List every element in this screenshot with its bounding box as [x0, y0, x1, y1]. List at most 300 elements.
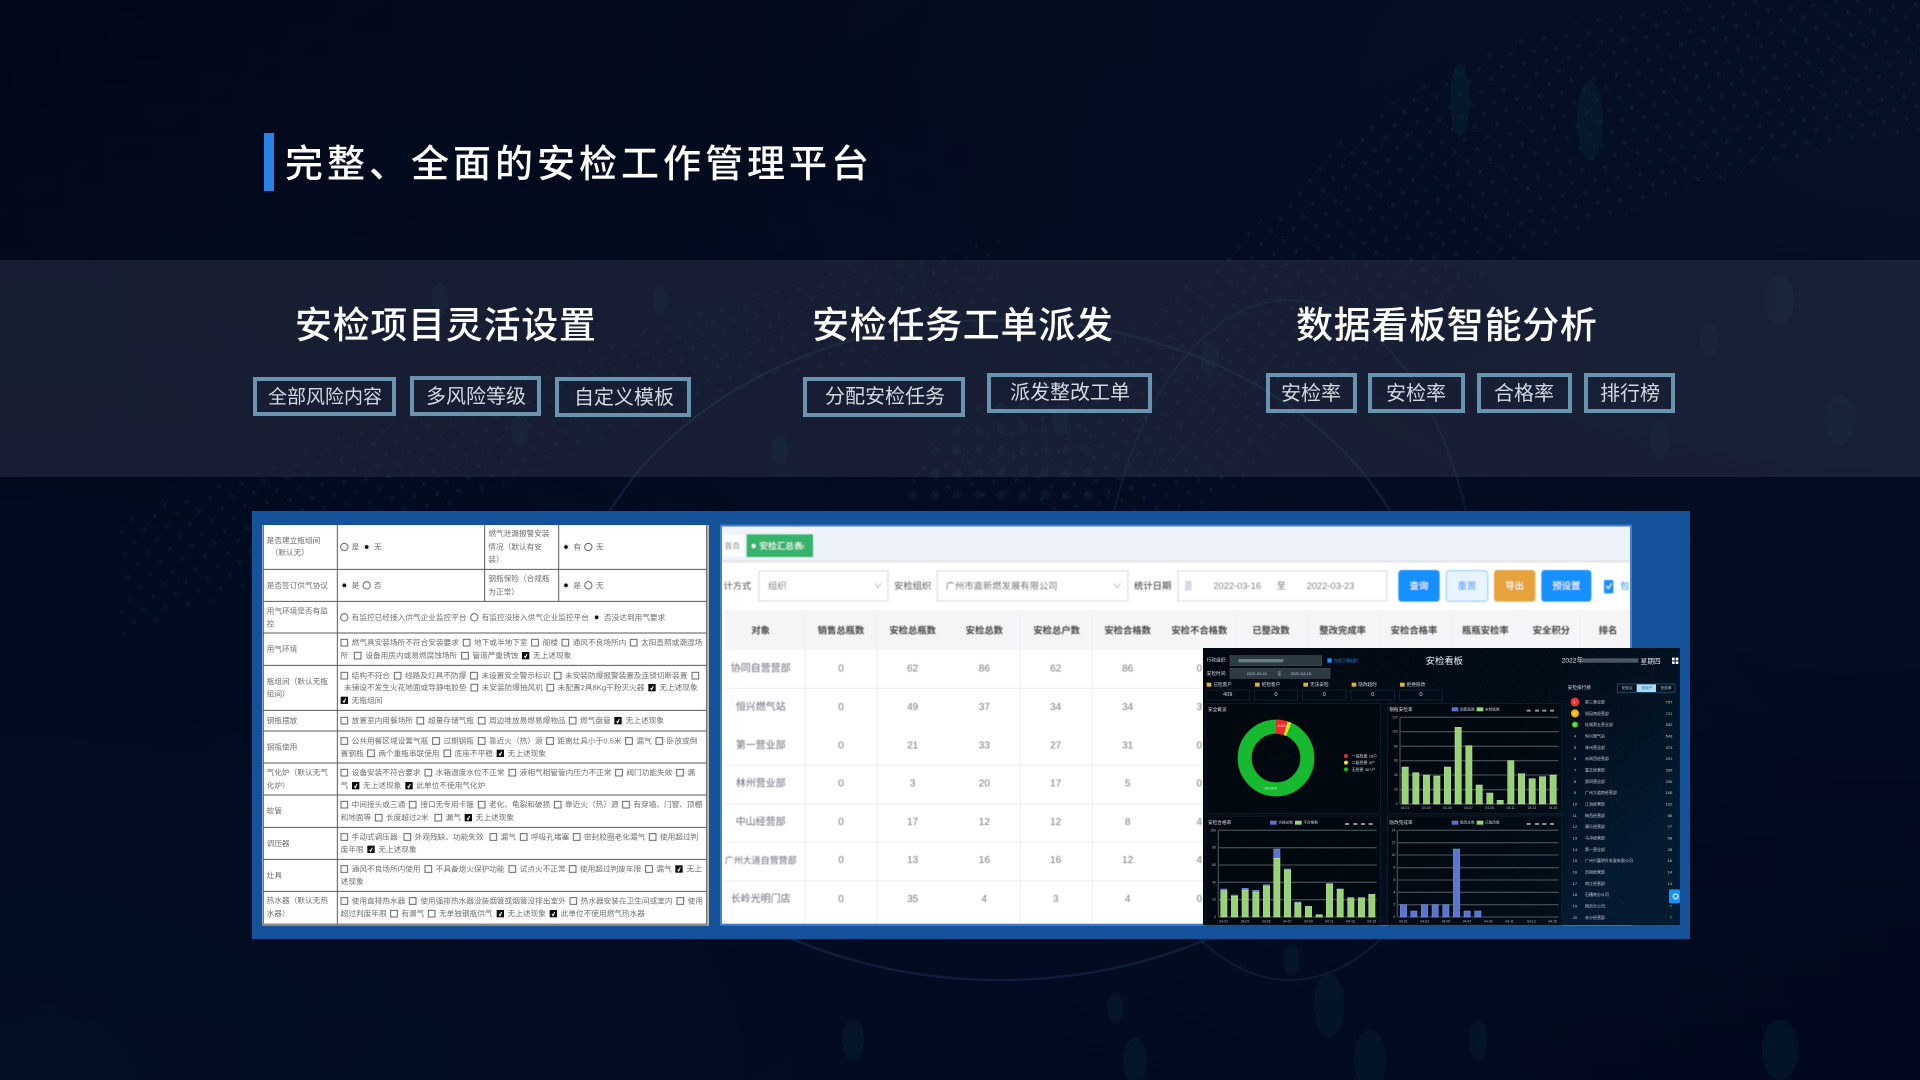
- filter row: 计方式: [723, 580, 751, 591]
- form text: 通风不良场所内使用: [352, 863, 421, 873]
- ranking list: 106: [1666, 790, 1673, 795]
- tab bar: [723, 534, 813, 557]
- form text: 无上述现象: [363, 780, 402, 790]
- table text: 86: [979, 663, 990, 674]
- form text: 气: [341, 780, 349, 790]
- ranking list: 543: [1666, 733, 1673, 738]
- filter row: 统计日期: [1134, 580, 1171, 591]
- filter row: 组织: [768, 580, 787, 591]
- ranking list: 7: [1670, 915, 1673, 920]
- bar chart: cylinder inspection rate: 钢瓶安检率: [1389, 706, 1413, 713]
- table text: 0: [1197, 894, 1203, 905]
- bar chart: cylinder inspection rate: 04-07: [1464, 806, 1473, 810]
- ranking list: 721: [1666, 711, 1673, 716]
- form text: 钢瓶摆放: [267, 715, 298, 725]
- donut chart: safety overview: 无隐患 387户: [1352, 766, 1375, 772]
- form text: 是否建立瓶组间: [267, 535, 320, 545]
- bar chart: cylinder inspection rate: 安检瓶数: [1485, 706, 1500, 711]
- form text: 无: [374, 542, 382, 551]
- table text: 安检总户数: [1033, 625, 1081, 636]
- stat cards: 0: [1371, 692, 1374, 698]
- form text: 热水器（默认无热: [267, 895, 328, 905]
- table text: 排名: [1599, 625, 1617, 636]
- stat cards: 拒绝隐改: [1407, 681, 1426, 688]
- action buttons: 导出: [1505, 580, 1524, 591]
- bar chart: cylinder inspection rate: 100: [1392, 730, 1398, 734]
- tab bar: ×: [801, 542, 805, 551]
- bar chart: rectification rate: 04-01: [1399, 920, 1408, 924]
- ranking list: 林州营业部: [1585, 744, 1605, 750]
- dashboard header: 安检时间:: [1207, 670, 1227, 677]
- tag: [1586, 375, 1673, 411]
- ranking list: 269: [1666, 767, 1673, 772]
- table text: 安检合格数: [1104, 625, 1152, 636]
- table text: 广州大道自营营部: [725, 855, 797, 866]
- tag: [255, 379, 394, 414]
- form text: 阁楼: [543, 637, 558, 647]
- action buttons: 重置: [1458, 580, 1476, 591]
- form text: 有: [573, 541, 581, 551]
- table text: 31: [1122, 740, 1134, 751]
- bar chart: cylinder inspection rate: 04-05: [1443, 806, 1452, 810]
- ranking list: [1568, 684, 1675, 920]
- ranking list: 13: [1573, 835, 1578, 840]
- table text: 37: [979, 702, 990, 713]
- filter row: 安检组织: [894, 580, 931, 591]
- table text: 17: [1050, 778, 1062, 789]
- bar chart: rectification rate: 4: [1393, 890, 1395, 894]
- dashboard header: 2022-04-01: [1247, 671, 1268, 676]
- bar chart: rectification rate: 04-05: [1442, 920, 1450, 924]
- table text: 安检总数: [966, 625, 1004, 636]
- ranking list: 3: [1573, 722, 1576, 727]
- tag: 多风险等级: [426, 385, 526, 408]
- bar chart: inspection pass rate: 04-07: [1283, 920, 1292, 924]
- dashboard header: 星期四: [1641, 657, 1661, 665]
- form text: 长度超过2米: [386, 812, 429, 822]
- tag: [412, 378, 539, 414]
- bar chart: rectification rate: 8: [1393, 866, 1395, 870]
- ranking list: 757: [1666, 699, 1673, 704]
- filter row: [723, 571, 1387, 601]
- table text: 0: [1197, 740, 1203, 751]
- form text: 装）: [488, 554, 504, 564]
- table text: 34: [1122, 702, 1134, 713]
- form text: 无瓶组间: [352, 695, 382, 705]
- form text: 漏气: [636, 735, 652, 745]
- bar chart: inspection pass rate: 04-05: [1262, 920, 1271, 924]
- ranking list: 第三营业部: [1585, 698, 1605, 704]
- table text: 4: [1197, 817, 1203, 828]
- table text: 0: [838, 740, 844, 751]
- bar chart: rectification rate: 04-03: [1420, 920, 1429, 924]
- dashboard header: 2022年: [1562, 656, 1583, 665]
- bar chart: cylinder inspection rate: 04-13: [1528, 806, 1536, 810]
- action buttons: 预设置: [1552, 581, 1580, 591]
- tag: 排行榜: [1600, 382, 1660, 405]
- table text: 86: [1122, 663, 1134, 674]
- ranking list: 8: [1574, 779, 1577, 784]
- ranking list: 安检排行榜: [1568, 684, 1591, 691]
- ranking list: 19: [1573, 903, 1578, 908]
- title accent bar: [264, 133, 274, 191]
- form text: 放置室内用餐场所: [352, 715, 413, 725]
- form text: 有穿墙、门窗、顶棚: [633, 799, 703, 809]
- form text: 情况（默认有安: [488, 541, 542, 551]
- ranking list: 广州兴嘉明升发展有限公司: [1585, 857, 1633, 863]
- bar chart: rectification rate: 已隐改数: [1485, 820, 1500, 825]
- bar chart: rectification rate: 04-09: [1484, 920, 1493, 924]
- ranking list: 赤岗西经营部: [1585, 755, 1609, 761]
- feature column: data dashboard: [1268, 305, 1673, 411]
- form text: 燃气具安装场所不符合安装要求: [352, 637, 459, 647]
- form text: 使用超过判废年限: [580, 863, 642, 873]
- ranking list: 5: [1574, 745, 1577, 750]
- form text: 瓶组间（默认无瓶: [267, 676, 328, 686]
- dashboard header: [1207, 655, 1678, 678]
- donut chart: safety overview: [1208, 706, 1377, 791]
- dashboard header: 2022-04-15: [1291, 671, 1312, 676]
- form text: 超量存储气瓶: [428, 715, 474, 725]
- form text: 线路及灯具不防爆: [405, 670, 467, 680]
- table text: 4: [982, 894, 988, 905]
- form text: 为正常）: [488, 586, 519, 596]
- form text: 不具备熄火保护功能: [436, 863, 505, 873]
- tag: [1479, 375, 1570, 411]
- ranking list: 16: [1573, 869, 1578, 874]
- form text: 所: [341, 650, 349, 660]
- form text: 否没达到用气要求: [604, 612, 666, 622]
- ranking list: 员岗经营部: [1585, 868, 1605, 874]
- heading: 安检项目灵活设置: [295, 305, 597, 346]
- table text: 0: [838, 817, 844, 828]
- table text: 0: [838, 855, 844, 866]
- form text: 无单独钢瓶供气: [439, 908, 493, 918]
- ranking list: 374: [1666, 745, 1673, 750]
- bar chart: inspection pass rate: 60: [1212, 863, 1216, 867]
- bar chart: rectification rate: 隐改总数: [1460, 820, 1475, 825]
- bar chart: inspection pass rate: 04-03: [1241, 920, 1249, 924]
- form text: 设备安装不符合要求: [352, 767, 421, 777]
- form text: [267, 528, 703, 918]
- bar chart: rectification rate: 04-13: [1527, 920, 1536, 924]
- ranking list: 4: [1574, 733, 1577, 738]
- form text: 有监控没接入供气企业监控平台: [482, 612, 589, 622]
- form text: 液相气相管管内压力不正常: [520, 767, 612, 777]
- ranking list: 康乐经营部: [1585, 823, 1605, 829]
- form text: 中间接头或三通: [352, 799, 406, 809]
- table text: 12: [1050, 817, 1062, 828]
- ranking list: 广州大道南经营部: [1585, 789, 1617, 795]
- ranking list: 256: [1666, 779, 1673, 784]
- form text: 述现象: [341, 876, 364, 886]
- form text: 老化、龟裂和破损: [489, 799, 551, 809]
- bar chart: inspection pass rate: 04-01: [1219, 920, 1228, 924]
- form text: 漏: [687, 767, 695, 777]
- form text: 水箱温度水位不正常: [436, 767, 505, 777]
- ranking list: 江海经营部: [1585, 800, 1605, 806]
- stat cards: 0: [1274, 692, 1278, 698]
- table text: 16: [979, 855, 990, 866]
- ranking list: 9: [1574, 790, 1577, 795]
- bar chart: rectification rate: 04-11: [1506, 920, 1514, 924]
- form text: 卧放或倒: [667, 735, 698, 745]
- form text: 未安装防爆抽风机: [482, 682, 543, 692]
- form text: 是否签订供气协议: [267, 580, 328, 590]
- action buttons: [1398, 570, 1629, 602]
- table text: 62: [907, 663, 919, 674]
- bar chart: inspection pass rate: 04-15: [1367, 920, 1376, 924]
- stat cards: 已检客户: [1213, 681, 1232, 688]
- ranking list: 赤沙经营部: [1585, 914, 1605, 920]
- table lines: [725, 610, 1630, 923]
- donut chart: safety overview: 一般隐患 18户: [1352, 752, 1377, 758]
- ranking list: 14: [1668, 869, 1673, 874]
- table text: 5: [1125, 778, 1131, 789]
- form text: 试点火不正常: [520, 863, 566, 873]
- ranking list: 马冲经营部: [1585, 834, 1605, 840]
- form text: 使用超过判: [660, 831, 698, 841]
- bar chart: rectification rate: 6: [1393, 878, 1395, 882]
- form text: 漏气: [656, 863, 672, 873]
- table text: 3: [910, 778, 916, 789]
- table text: 安全积分: [1533, 625, 1571, 636]
- form text: 底座不平稳: [455, 748, 493, 758]
- form text: 无上述现象: [533, 650, 572, 660]
- ranking list: 12: [1573, 824, 1578, 829]
- ranking list: 58: [1668, 835, 1673, 840]
- form text: 否: [374, 581, 382, 590]
- table text: 销售总瓶数: [818, 625, 865, 636]
- bar chart: inspection pass rate: 20: [1212, 898, 1216, 902]
- ranking list: 7: [1574, 767, 1577, 772]
- form text: 距离灶具小于0.5米: [557, 735, 622, 745]
- bar chart: cylinder inspection rate: 04-03: [1422, 806, 1431, 810]
- table text: 16: [1050, 855, 1062, 866]
- donut chart: safety overview: 安全概览: [1208, 706, 1227, 713]
- table text: 中山经营部: [736, 815, 786, 828]
- table text: 12: [979, 817, 990, 828]
- panel: inspection summary table: [721, 526, 1631, 925]
- ranking list: 102: [1666, 801, 1673, 806]
- form text: 太阳直照或潮湿场: [641, 637, 703, 647]
- table text: 62: [1050, 663, 1062, 674]
- ranking list: 旭因南经营部: [1585, 710, 1609, 716]
- form text: 无上述现象: [659, 682, 698, 692]
- ranking list: 网员分公司: [1585, 902, 1605, 908]
- tag: [989, 375, 1150, 411]
- form text: 无: [596, 542, 604, 551]
- stat cards: 拒检客户: [1262, 681, 1280, 688]
- bar chart: inspection pass rate: 04-09: [1304, 920, 1313, 924]
- ranking list: 10: [1573, 801, 1578, 806]
- donut chart: safety overview: 94.62%: [1264, 787, 1278, 791]
- table text: 恒兴燃气站: [736, 700, 786, 713]
- ranking list: 安检户: [1641, 685, 1653, 690]
- form text: 超过判废年限: [341, 908, 387, 918]
- bar chart: cylinder inspection rate: 04-15: [1549, 806, 1557, 810]
- bar chart: inspection pass rate: 04-13: [1346, 920, 1355, 924]
- tag: 自定义模板: [574, 386, 674, 409]
- table text: 33: [979, 740, 990, 751]
- ranking list: 6: [1574, 756, 1577, 761]
- action buttons: 查询: [1410, 580, 1428, 591]
- stat cards: 0: [1323, 692, 1326, 698]
- table grid: [262, 525, 709, 926]
- donut chart: safety overview: 4.44%: [1277, 724, 1289, 728]
- form text: 结构不符合: [352, 670, 390, 680]
- tag: 安检率: [1386, 382, 1446, 405]
- table text: 整改完成率: [1319, 625, 1366, 636]
- ranking list: 14: [1573, 847, 1578, 852]
- form text: 漏气: [501, 831, 516, 841]
- ranking list: 安检点: [1622, 685, 1633, 690]
- tab bar: 首页: [725, 540, 740, 550]
- bar chart: rectification rate: 04-07: [1463, 920, 1471, 924]
- table text: 34: [1050, 702, 1062, 713]
- form text: 置钢瓶: [341, 748, 364, 758]
- ranking list: 11: [1573, 813, 1578, 818]
- form text: 外观残缺、功能失效: [415, 831, 484, 841]
- table text: 协同自营营部: [731, 661, 791, 674]
- ranking list: 第一营业部: [1585, 846, 1605, 852]
- dashboard header: 行政组织:: [1207, 656, 1227, 663]
- tag: 合格率: [1494, 382, 1554, 405]
- bar chart: inspection pass rate: 合格总数: [1278, 820, 1293, 825]
- form text: 过期钢瓶: [443, 735, 474, 745]
- filter row: 至: [1277, 581, 1286, 591]
- action buttons: 包: [1620, 580, 1629, 591]
- bar chart: rectification rate: 14: [1392, 828, 1395, 832]
- settings button: [1669, 889, 1680, 903]
- tag: [557, 379, 689, 415]
- form text: 呼吸孔堵塞: [531, 831, 570, 841]
- form text: 无: [596, 581, 604, 590]
- bar chart: inspection pass rate: 0: [1214, 915, 1216, 919]
- form text: 是: [352, 581, 360, 590]
- panel: dashboard: [1203, 648, 1680, 925]
- bar chart: cylinder inspection rate: 120: [1392, 715, 1398, 719]
- form text: 靠近火（热）源: [565, 799, 619, 809]
- form text: 密封胶圈老化漏气: [584, 831, 646, 841]
- bar chart: rectification rate: 12: [1392, 841, 1395, 845]
- ranking list: 20: [1573, 915, 1578, 920]
- bar chart: cylinder inspection rate: 0: [1396, 802, 1398, 806]
- bar chart: inspection pass rate: 40: [1212, 880, 1216, 884]
- ranking list: 桂城第五营业部: [1585, 721, 1613, 727]
- table text: 对象: [751, 625, 771, 636]
- bar chart: cylinder inspection rate: 04-09: [1485, 806, 1494, 810]
- form text: 钢瓶保险（合规瓶: [488, 573, 550, 583]
- form text: 无上述现象: [508, 748, 546, 758]
- tag: 派发整改工单: [1010, 381, 1130, 404]
- form text: 靠近火（热）源: [489, 735, 543, 745]
- form text: （默认无）: [271, 547, 309, 557]
- bar chart: cylinder inspection rate: 60: [1394, 759, 1398, 763]
- form text: 地下或半地下室: [474, 637, 528, 647]
- bar chart: rectification rate: 04-15: [1548, 920, 1557, 924]
- form text: 使用: [688, 895, 703, 905]
- table text: 20: [979, 778, 990, 789]
- form text: 无上述现象: [476, 812, 514, 822]
- bar chart: rectification rate: 2: [1393, 903, 1395, 907]
- form text: 热水器安装在卫生间或室内: [581, 895, 673, 905]
- tag: [1268, 375, 1355, 411]
- ranking list: 恒兴燃气站: [1585, 732, 1605, 738]
- form text: 通风不良场所内: [573, 637, 626, 647]
- form text: 漏气: [446, 812, 461, 822]
- form text: 设备用房内或易燃腐蚀场所: [365, 650, 458, 660]
- tag: 全部风险内容: [268, 386, 382, 408]
- bar chart: rectification rate: 隐改完成率: [1389, 819, 1413, 826]
- ranking list: 552: [1666, 722, 1673, 727]
- tab bar: 安检汇总表: [759, 540, 803, 551]
- tag: 安检率: [1281, 382, 1341, 405]
- ranking list: 安检率: [1661, 685, 1672, 690]
- tag: 分配安检任务: [825, 385, 945, 408]
- table text: 0: [1197, 663, 1203, 674]
- form text: 废年限: [341, 844, 364, 854]
- bar chart: inspection pass rate: [1208, 819, 1377, 924]
- form text: 组间）: [267, 688, 290, 698]
- form text: 未安装防爆报警装置及连锁切断装置: [565, 670, 688, 680]
- table text: 瓶瓶安检率: [1462, 625, 1509, 636]
- bar chart: inspection pass rate: 04-11: [1325, 920, 1334, 924]
- form text: 阀门功能失效: [626, 767, 673, 777]
- table text: 长岭光明门店: [731, 892, 791, 905]
- ranking list: 第四营业部: [1585, 778, 1605, 784]
- bar chart: inspection pass rate: 100: [1210, 828, 1216, 832]
- table text: 13: [907, 855, 919, 866]
- ranking list: 14: [1668, 881, 1673, 886]
- stat cards: 隐改超时: [1358, 681, 1377, 688]
- heading: 安检任务工单派发: [812, 305, 1114, 346]
- bar chart: cylinder inspection rate: 04-01: [1401, 806, 1409, 810]
- bar chart: cylinder inspection rate: 销售瓶数: [1460, 706, 1475, 711]
- bar chart: rectification rate: 10: [1392, 853, 1395, 857]
- form text: 此单位不使用气化炉: [416, 780, 486, 790]
- table text: 27: [1050, 740, 1062, 751]
- table text: 3: [1197, 702, 1203, 713]
- form text: 未设置安全警示标识: [481, 670, 551, 680]
- ranking list: 85: [1668, 813, 1673, 818]
- heading: 数据看板智能分析: [1296, 305, 1598, 346]
- band: feature strip: [0, 260, 1920, 477]
- form text: 用气环境是否有监: [267, 605, 328, 615]
- stat cards: 409: [1223, 692, 1232, 698]
- table text: 12: [1122, 855, 1134, 866]
- form text: 公共用餐区域设置气瓶: [352, 735, 429, 745]
- bar chart: inspection pass rate: 80: [1212, 846, 1216, 850]
- feature column: task dispatch: [805, 305, 1150, 415]
- donut chart: safety overview: 409户: [1268, 751, 1292, 762]
- table text: [725, 625, 1617, 905]
- form text: 气化炉（默认无气: [267, 767, 328, 777]
- table text: 35: [907, 894, 919, 905]
- form text: 燃气泄漏报警安装: [488, 528, 550, 538]
- ranking list: 南江经营部: [1585, 880, 1605, 886]
- table text: 4: [1125, 894, 1131, 905]
- dashboard header: 安检看板: [1426, 655, 1463, 666]
- form text: 管道严重锈蚀: [472, 650, 519, 660]
- ranking list: 16: [1668, 858, 1673, 863]
- title: [264, 133, 873, 191]
- ranking list: 1: [1573, 699, 1576, 704]
- form text: 水器）: [267, 908, 290, 918]
- stat cards: 无法安检: [1310, 681, 1329, 688]
- panel: inspection form table: [262, 525, 709, 926]
- ranking list: 18: [1573, 892, 1578, 897]
